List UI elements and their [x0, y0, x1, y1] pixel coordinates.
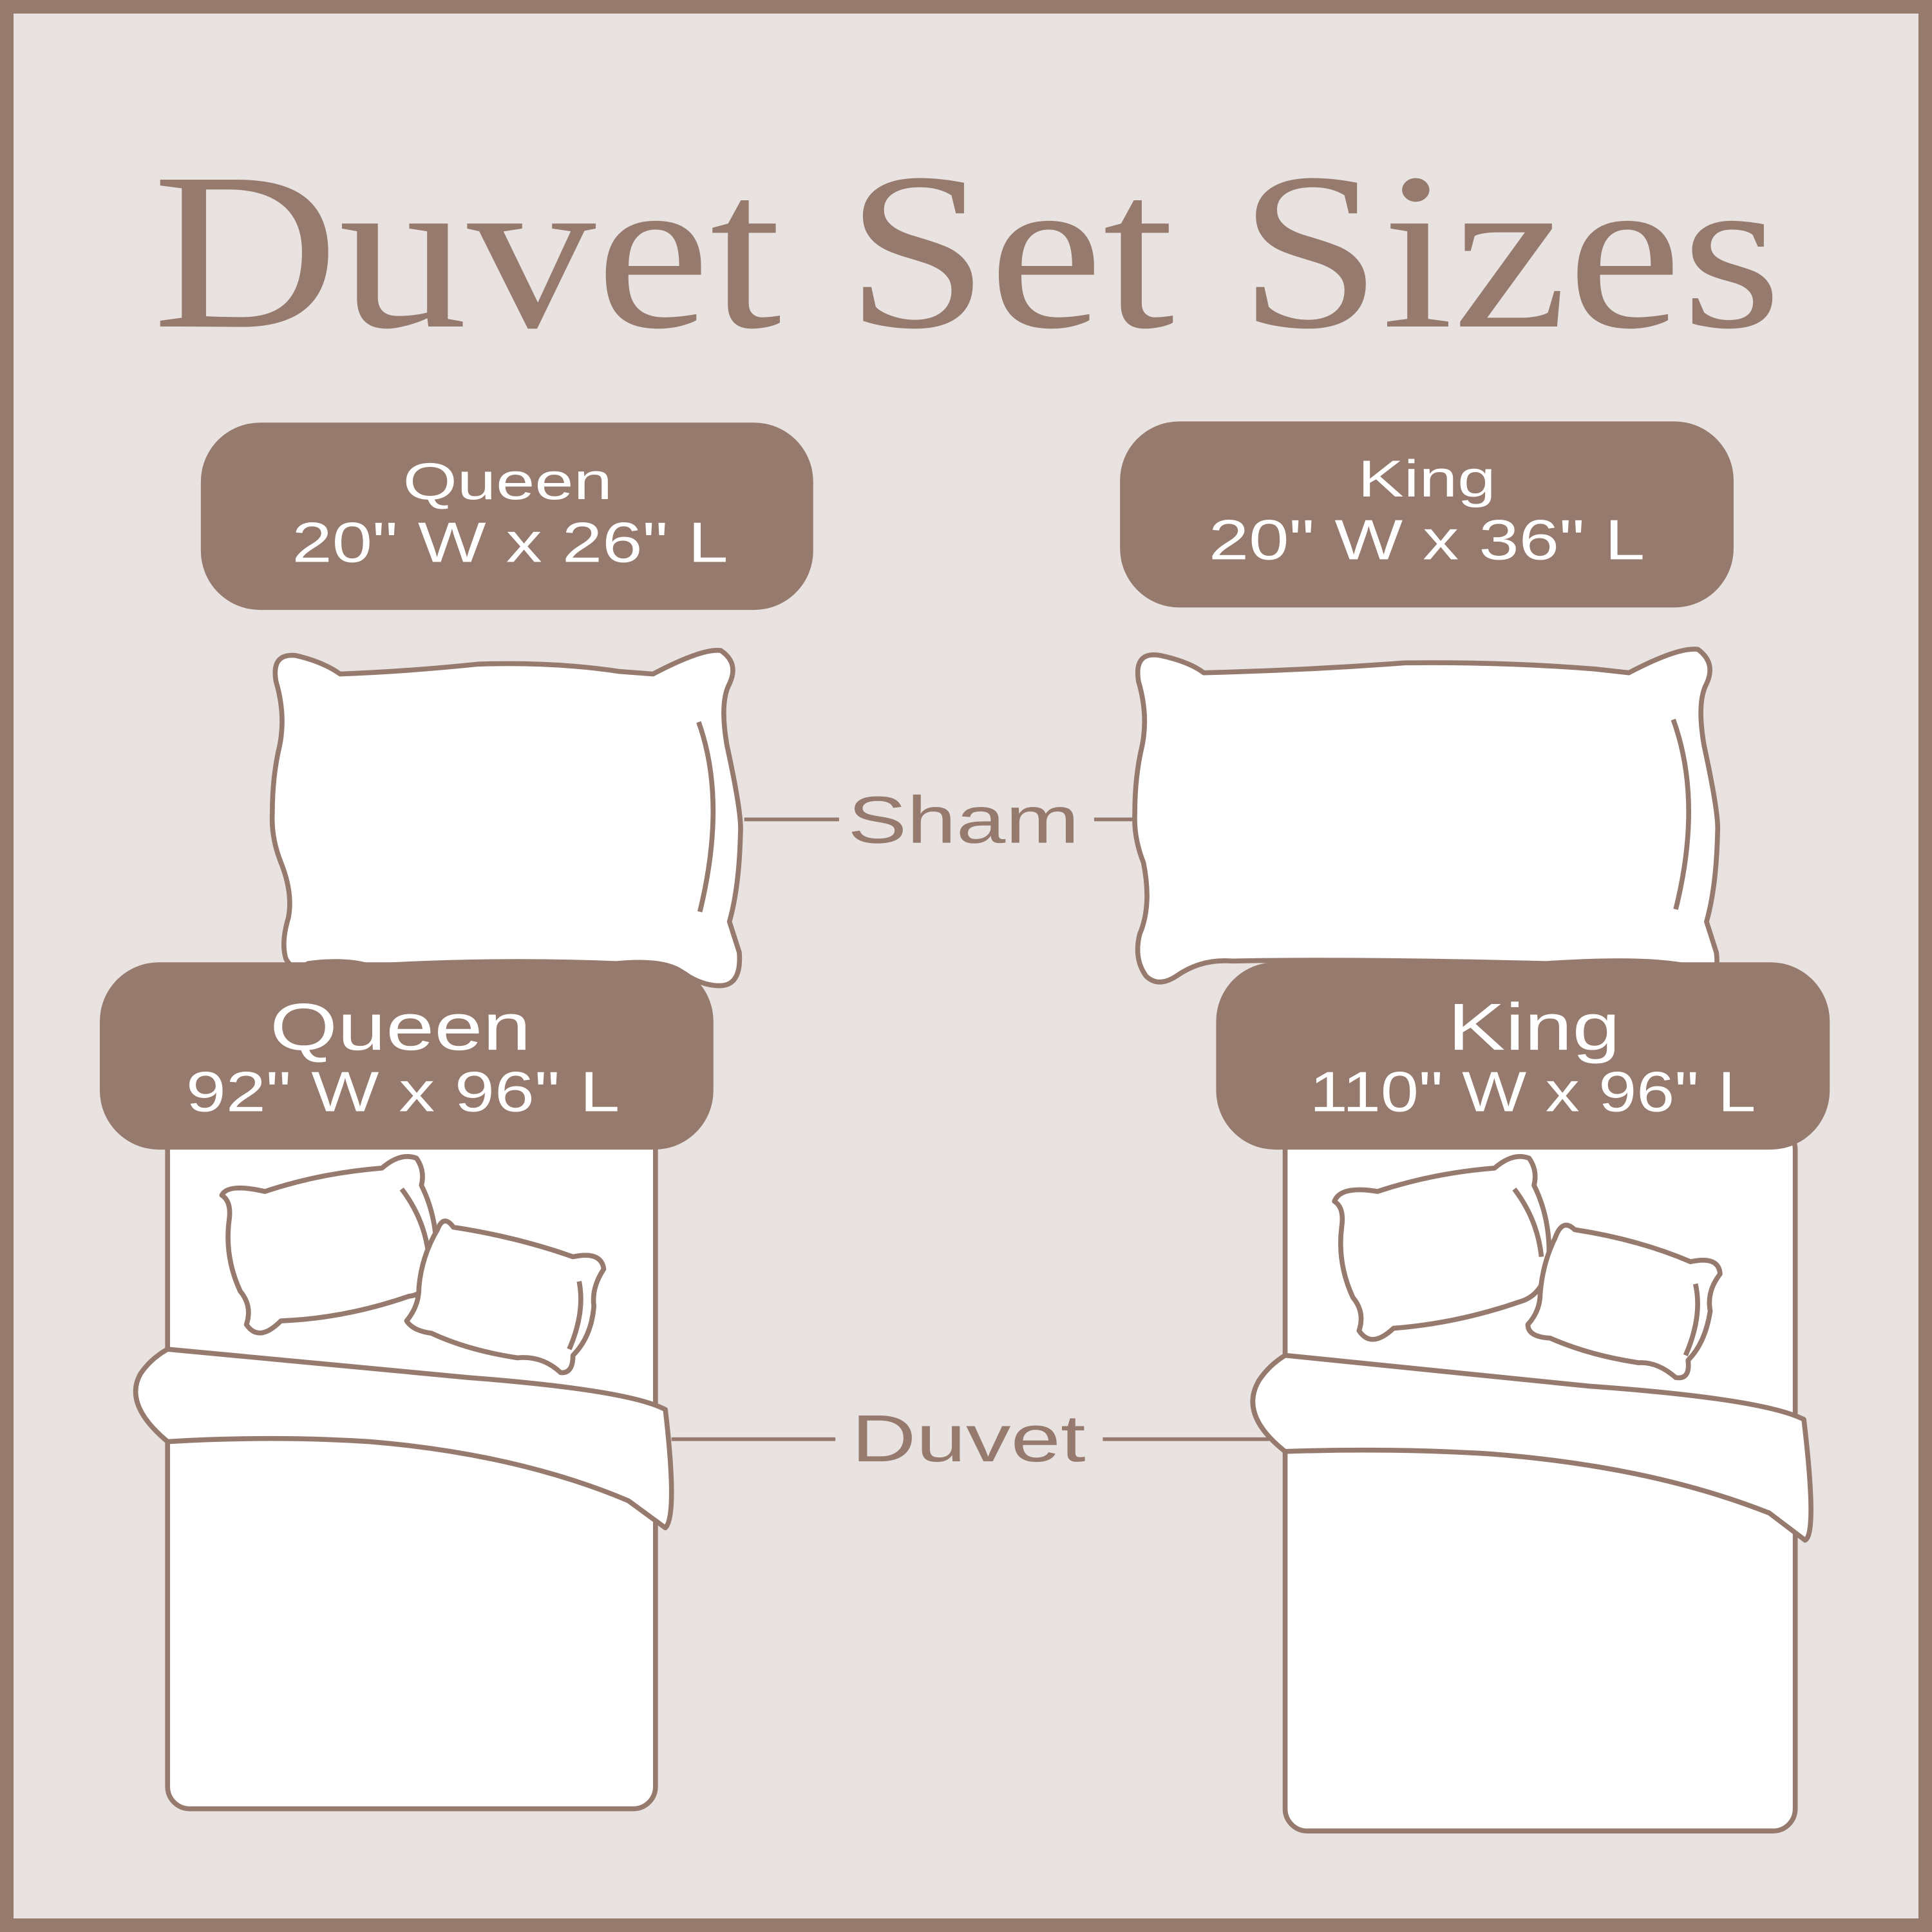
connector: sham	[744, 819, 1133, 820]
label: king sham: 20" W x 36" L	[1209, 508, 1645, 572]
label: queen duvet: Queen	[270, 989, 531, 1064]
title: Duvet Set Sizes	[153, 128, 1782, 375]
label: king sham: King	[1358, 450, 1496, 508]
label: queen duvet	[100, 962, 714, 1150]
label: queen sham: Queen	[403, 453, 612, 511]
label: queen sham	[201, 422, 813, 610]
icon: king bed	[1253, 1128, 1811, 1831]
label: king duvet	[1216, 962, 1830, 1150]
icon: queen bed	[136, 1128, 672, 1809]
text: duvet label: Duvet	[851, 1401, 1086, 1475]
connector: duvet	[672, 1438, 1269, 1440]
label: queen sham: 20" W x 26" L	[292, 510, 728, 574]
label: queen duvet: 92" W x 96" L	[186, 1060, 620, 1124]
icon: queen sham pillow	[272, 650, 741, 986]
label: king duvet: King	[1448, 989, 1620, 1064]
text: sham label: Sham	[848, 782, 1079, 857]
label: king sham	[1120, 421, 1734, 607]
label: king duvet: 110" W x 96" L	[1310, 1060, 1756, 1124]
icon: king sham pillow	[1135, 649, 1718, 982]
